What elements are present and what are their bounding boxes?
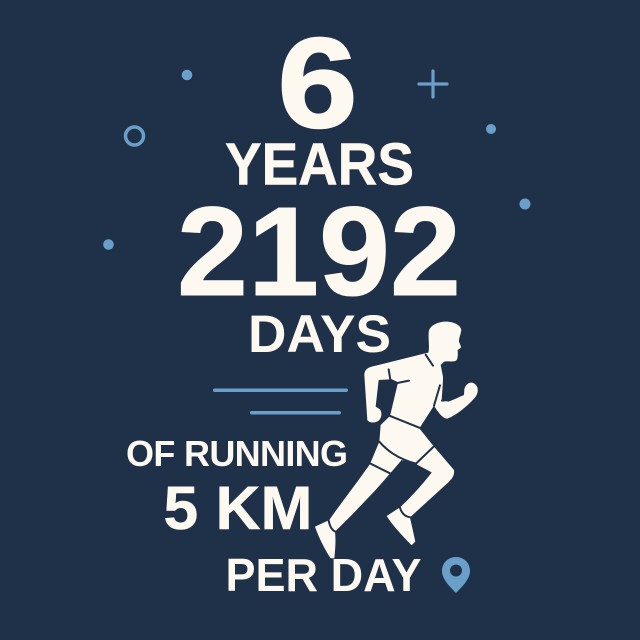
label: YEARS: YEARS <box>225 132 414 198</box>
label: DAYS: DAYS <box>248 305 391 364</box>
icon: dot far right <box>520 198 530 210</box>
icon: ring <box>126 127 144 145</box>
text: OF RUNNING: OF RUNNING <box>126 433 348 474</box>
big number 6: 6 <box>278 12 358 155</box>
big number 2192: 2192 <box>177 181 461 322</box>
icon: location pin <box>442 557 470 593</box>
runner silhouette <box>315 322 478 558</box>
divider line short <box>250 411 341 414</box>
runner inner contour lines <box>329 355 448 532</box>
text: PER DAY: PER DAY <box>226 549 422 601</box>
icon: plus <box>419 71 447 97</box>
text: 5 KM: 5 KM <box>164 474 312 542</box>
icon: dot right <box>486 124 496 134</box>
divider line long <box>213 388 348 392</box>
icon: dot left <box>103 239 114 250</box>
icon: dot top left <box>182 70 192 80</box>
